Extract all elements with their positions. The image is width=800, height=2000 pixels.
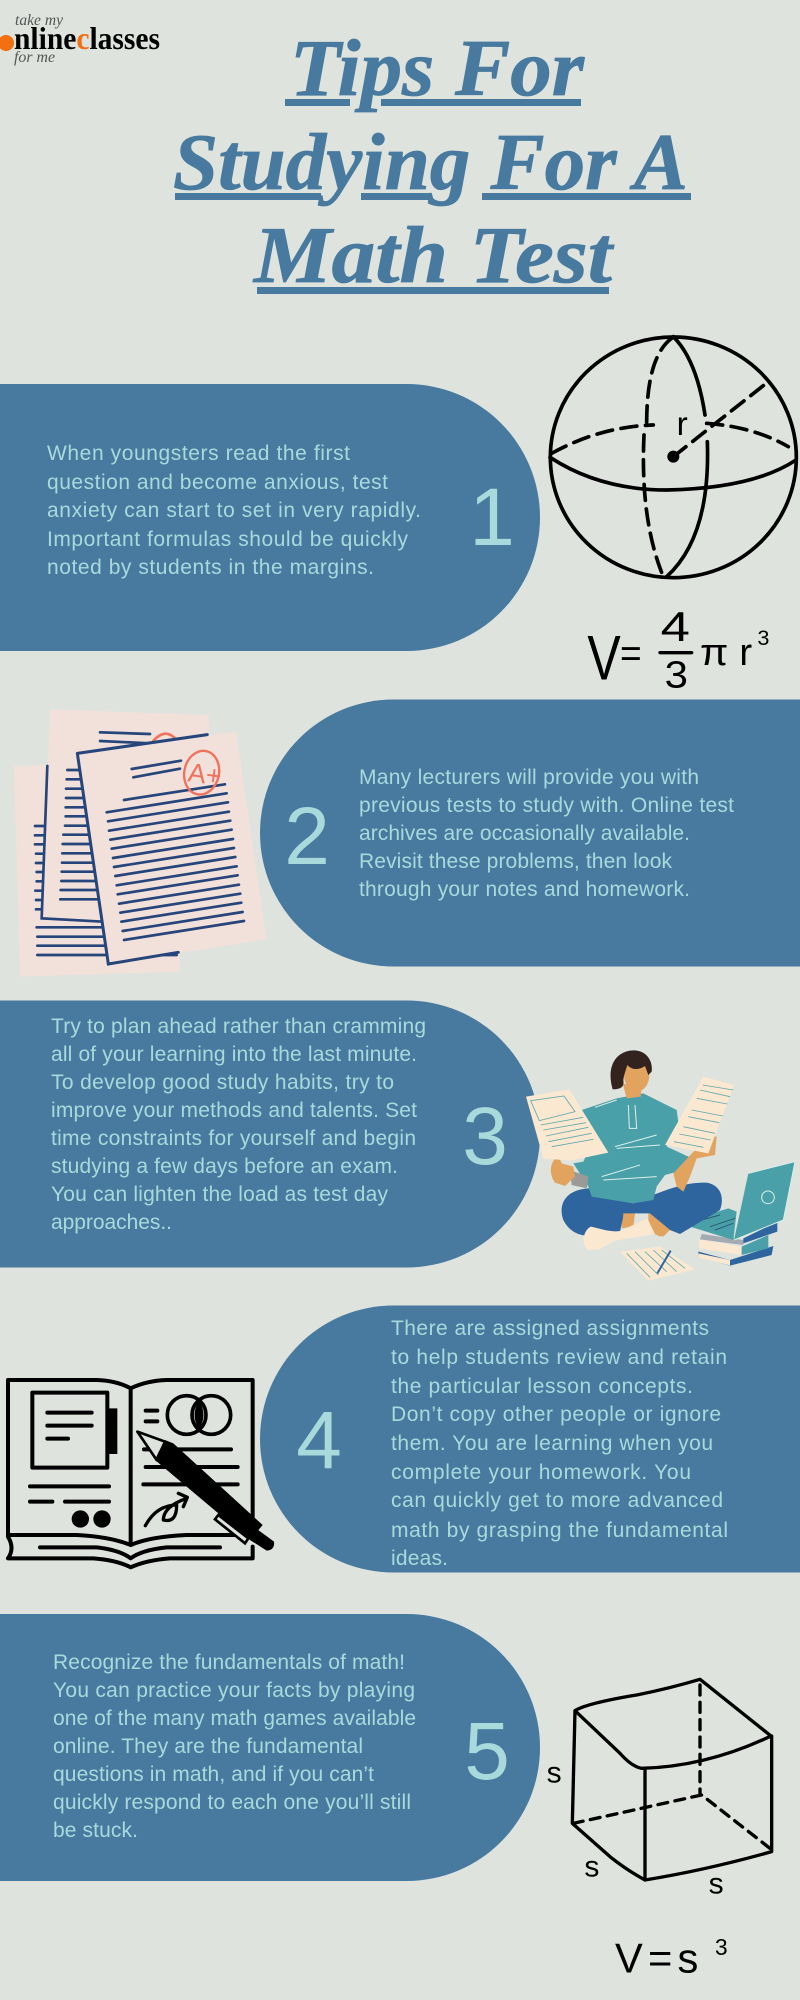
step 3 text: Try to plan ahead rather than cramming — [51, 1015, 426, 1038]
title: Tips For — [290, 25, 585, 113]
icon: cube: s — [547, 1757, 562, 1790]
step 1 text: When youngsters read the first — [47, 442, 350, 465]
step 2 text — [359, 766, 734, 901]
panel: step 3 — [0, 1000, 540, 1268]
step 3 text: You can lighten the load as test day — [51, 1183, 388, 1206]
step 3 text: improve your methods and talents. Set — [51, 1099, 417, 1122]
step 2 number: 2 — [284, 791, 330, 882]
arms and hands — [551, 1135, 717, 1192]
logo — [0, 12, 160, 66]
icon: graded papers: A+ — [186, 757, 224, 792]
sock — [584, 1218, 655, 1250]
formula: sphere volume: 3 — [665, 654, 688, 697]
step 1 text: Important formulas should be quickly — [47, 528, 408, 551]
icon: sphere: r — [677, 406, 688, 443]
step 3 text: To develop good study habits, try to — [51, 1071, 394, 1094]
step 4 text: Don’t copy other people or ignore — [391, 1403, 721, 1426]
step 3 number: 3 — [462, 1091, 508, 1182]
panel: step 2 — [260, 700, 800, 966]
step 1 text — [47, 442, 421, 579]
step 5 text: be stuck. — [53, 1819, 138, 1842]
paper lines — [531, 1085, 733, 1147]
formula: sphere volume: 3 — [757, 625, 769, 650]
icon: cube: s — [584, 1851, 599, 1884]
panel: step 1 — [0, 384, 540, 651]
left paper — [526, 1089, 608, 1161]
step 4 number: 4 — [296, 1395, 342, 1486]
step 2 text: Many lecturers will provide you with — [359, 766, 699, 789]
books — [698, 1222, 777, 1266]
formula: sphere volume — [587, 603, 769, 697]
pants — [562, 1183, 722, 1236]
step 5 text: Recognize the fundamentals of math! — [53, 1651, 405, 1674]
step 5 number: 5 — [464, 1706, 510, 1797]
step 3 text: time constraints for yourself and begin — [51, 1127, 416, 1150]
formula: sphere volume: r — [739, 631, 752, 674]
step 5 text: quickly respond to each one you’ll still — [53, 1791, 411, 1814]
step 5 text: You can practice your facts by playing — [53, 1679, 415, 1702]
formula: sphere volume: = — [620, 632, 642, 676]
logo: nlineclasses — [14, 20, 160, 56]
illustration: student studying — [526, 1050, 795, 1281]
formula: cube volume: 3 — [715, 1934, 728, 1960]
head and hair — [611, 1050, 652, 1098]
step 5 text: one of the many math games available — [53, 1707, 416, 1730]
panel: step 4 — [260, 1306, 800, 1572]
step 2 text: previous tests to study with. Online test — [359, 794, 734, 817]
step 1 text: anxiety can start to set in very rapidly. — [47, 499, 421, 522]
step 4 text: can quickly get to more advanced — [391, 1489, 723, 1512]
logo: for me — [14, 49, 55, 66]
step 4 text: to help students review and retain — [391, 1346, 727, 1369]
panel: step 5 — [0, 1614, 540, 1881]
step 3 text — [51, 1015, 426, 1234]
title — [173, 25, 691, 300]
step 1 text: noted by students in the margins. — [47, 556, 374, 579]
step 4 text: the particular lesson concepts. — [391, 1375, 693, 1398]
step 5 text — [53, 1651, 416, 1842]
floor sheet with pen — [620, 1247, 695, 1281]
step 3 text: all of your learning into the last minute. — [51, 1043, 417, 1066]
formula: sphere volume: π — [700, 631, 728, 674]
laptop — [679, 1162, 795, 1240]
step 3 text: studying a few days before an exam. — [51, 1155, 398, 1178]
icon: sphere — [550, 337, 796, 578]
title: Math Test — [252, 212, 615, 300]
step 4 text: math by grasping the fundamental — [391, 1519, 728, 1542]
skin above sock — [623, 1213, 670, 1237]
step 4 text: ideas. — [391, 1547, 448, 1570]
logo: take my — [15, 12, 64, 29]
step 4 text: them. You are learning when you — [391, 1432, 713, 1455]
step 2 text: through your notes and homework. — [359, 878, 690, 901]
step 1 number: 1 — [469, 472, 515, 563]
formula: cube volume: V = s — [615, 1935, 698, 1982]
step 4 text: There are assigned assignments — [391, 1317, 709, 1340]
icon: graded papers — [14, 709, 267, 977]
legs — [622, 1212, 670, 1237]
step 2 text: archives are occasionally available. — [359, 822, 690, 845]
step 4 text — [391, 1317, 728, 1570]
torso — [573, 1093, 690, 1203]
right paper — [665, 1077, 734, 1153]
step 5 text: online. They are the fundamental — [53, 1735, 363, 1758]
formula: sphere volume: V — [587, 623, 621, 693]
step 4 text: complete your homework. You — [391, 1461, 691, 1484]
step 1 text: question and become anxious, test — [47, 471, 388, 494]
icon: open book and pen — [8, 1380, 274, 1567]
formula: sphere volume: 4 — [661, 603, 690, 650]
step 3 text: approaches.. — [51, 1211, 172, 1234]
icon: cube: s — [709, 1867, 724, 1900]
step 5 text: questions in math, and if you can’t — [53, 1763, 374, 1786]
icon: cube — [547, 1679, 772, 1900]
title: Studying For A — [173, 119, 688, 207]
step 2 text: Revisit these problems, then look — [359, 850, 672, 873]
